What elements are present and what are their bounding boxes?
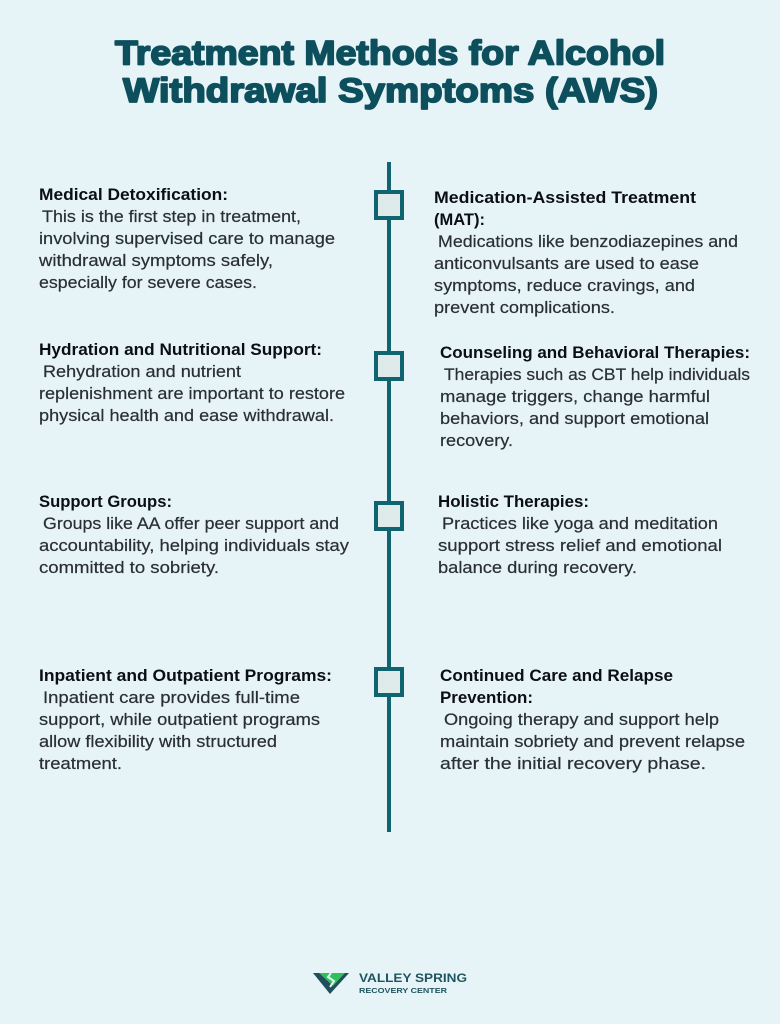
- text block: Support Groups: committed to sobriety.: [39, 559, 219, 577]
- text block: Continued Care and Relapse Prevention: Ongoing therapy and support help: [444, 711, 719, 729]
- text block: Continued Care and Relapse Prevention: after the initial recovery phase.: [440, 755, 706, 773]
- text block: Medical Detoxification: especially for severe cases.: [39, 274, 257, 292]
- text block: Holistic Therapies: Practices like yoga and meditation: [442, 515, 718, 533]
- text block: Counseling and Behavioral Therapies: manage triggers, change harmful: [440, 388, 710, 406]
- text block: Counseling and Behavioral Therapies: Therapies such as CBT help individuals: [444, 366, 750, 384]
- text block: Hydration and Nutritional Support: physical health and ease withdrawal.: [39, 407, 334, 425]
- text block: Counseling and Behavioral Therapies: [440, 344, 750, 450]
- text block: Continued Care and Relapse Prevention: [440, 667, 745, 773]
- text block: Support Groups: accountability, helping individuals stay: [39, 537, 350, 555]
- text block: Holistic Therapies: support stress relief and emotional: [438, 537, 722, 555]
- logo: [313, 973, 467, 995]
- text block: Medication-Assisted Treatment: symptoms, reduce cravings, and: [434, 277, 695, 295]
- text block: Continued Care and Relapse Prevention: maintain sobriety and prevent relapse: [440, 733, 745, 751]
- text block: Holistic Therapies: balance during recovery.: [438, 559, 637, 577]
- marker 1: [376, 192, 402, 218]
- text block: Support Groups: [39, 493, 350, 577]
- marker 3: [376, 503, 402, 529]
- text block: Inpatient and Outpatient Programs: Inpatient care provides full-time: [43, 689, 300, 707]
- text block: Holistic Therapies: Holistic Therapies:: [438, 493, 589, 511]
- text block: Medication-Assisted Treatment: prevent complications.: [434, 299, 615, 317]
- text block: Medication-Assisted Treatment: (MAT):: [434, 211, 485, 229]
- text block: Medical Detoxification: Medical Detoxification:: [39, 186, 228, 204]
- icon: valley spring mark: [313, 973, 349, 994]
- text block: Medication-Assisted Treatment: Medication-Assisted Treatment: [434, 189, 697, 207]
- title: [115, 34, 665, 110]
- text block: Hydration and Nutritional Support: Rehydration and nutrient: [43, 363, 241, 381]
- text block: Medical Detoxification: involving supervised care to manage: [39, 230, 335, 248]
- title: Treatment Methods for Alcohol: [115, 34, 665, 72]
- text block: Medication-Assisted Treatment: anticonvulsants are used to ease: [434, 255, 699, 273]
- text block: Inpatient and Outpatient Programs: allow flexibility with structured: [39, 733, 277, 751]
- text block: Hydration and Nutritional Support: Hydration and Nutritional Support:: [39, 341, 322, 359]
- logo wordmark: VALLEY SPRING: [359, 973, 467, 985]
- title: Withdrawal Symptoms (AWS): [123, 72, 658, 110]
- text block: Medical Detoxification: This is the first step in treatment,: [42, 208, 301, 226]
- text block: Inpatient and Outpatient Programs: [39, 667, 332, 773]
- text block: Hydration and Nutritional Support: replenishment are important to restore: [39, 385, 345, 403]
- text block: Counseling and Behavioral Therapies: behaviors, and support emotional: [440, 410, 709, 428]
- text block: Support Groups: Groups like AA offer peer support and: [43, 515, 339, 533]
- text block: Continued Care and Relapse Prevention: Continued Care and Relapse: [440, 667, 673, 685]
- text block: Inpatient and Outpatient Programs: Inpatient and Outpatient Programs:: [39, 667, 332, 685]
- text block: Inpatient and Outpatient Programs: support, while outpatient programs: [39, 711, 320, 729]
- text block: Medical Detoxification: [38, 186, 335, 292]
- text block: Holistic Therapies: [438, 493, 722, 577]
- text block: Continued Care and Relapse Prevention: Prevention:: [440, 689, 533, 707]
- text block: Counseling and Behavioral Therapies: recovery.: [440, 432, 513, 450]
- text block: Medication-Assisted Treatment: [434, 189, 738, 317]
- text block: Inpatient and Outpatient Programs: treatment.: [39, 755, 122, 773]
- text block: Medication-Assisted Treatment: Medications like benzodiazepines and: [438, 233, 738, 251]
- logo: RECOVERY CENTER: [359, 986, 448, 995]
- text block: Counseling and Behavioral Therapies: Counseling and Behavioral Therapies:: [440, 344, 750, 362]
- timeline spine with markers: [376, 162, 402, 832]
- text block: Medical Detoxification: withdrawal symptoms safely,: [38, 252, 273, 270]
- marker 2: [376, 353, 402, 379]
- text block: Support Groups: Support Groups:: [39, 493, 172, 511]
- text block: Hydration and Nutritional Support: [39, 341, 345, 425]
- marker 4: [376, 669, 402, 695]
